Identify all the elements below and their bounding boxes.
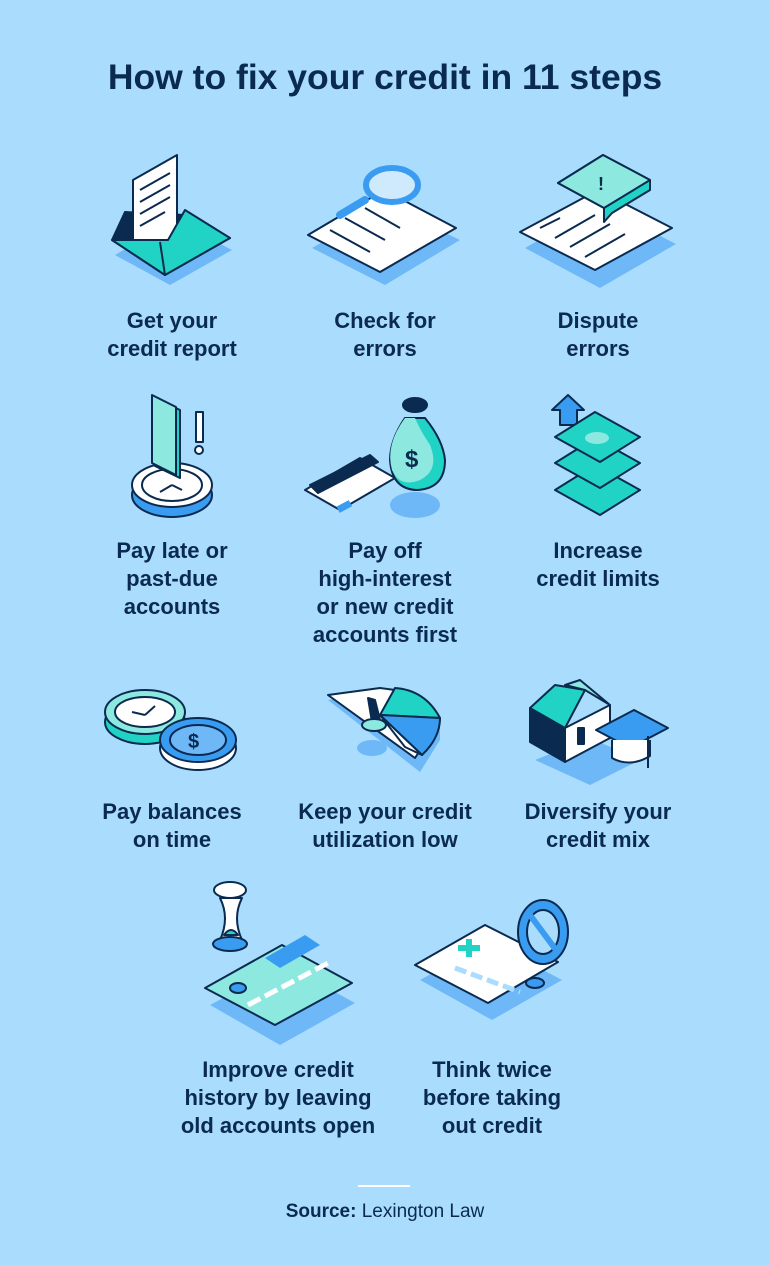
icon: card and money bag: $ (405, 446, 419, 473)
label: think twice: before taking (423, 1085, 561, 1110)
icon: dispute speech bubble: ! (598, 174, 604, 194)
label: improve credit history: Improve credit (202, 1057, 354, 1082)
icon: house and graduation cap (530, 680, 668, 785)
label: improve credit history (181, 1057, 375, 1138)
label: keep utilization low: utilization low (312, 827, 458, 852)
label: get your credit report (107, 308, 237, 361)
label: pay off high-interest: accounts first (313, 622, 457, 647)
label: think twice: out credit (442, 1113, 542, 1138)
label: diversify credit mix (525, 799, 671, 852)
label: pay off high-interest: high-interest (318, 566, 452, 591)
label: pay late accounts: past-due (126, 566, 218, 591)
source: Source: Lexington Law (286, 1201, 484, 1222)
icon: envelope with report (112, 155, 232, 285)
label: improve credit history: history by leaving (184, 1085, 372, 1110)
label: pay off high-interest (313, 538, 457, 647)
label: pay off high-interest: or new credit (317, 594, 453, 619)
label: pay late accounts (116, 538, 228, 619)
icon: magnifier over document (308, 168, 460, 285)
divider (358, 1185, 410, 1187)
label: pay late accounts: accounts (124, 594, 220, 619)
label: dispute errors (558, 308, 638, 361)
label: check for errors (334, 308, 436, 361)
label: increase credit limits: credit limits (536, 566, 660, 591)
label: diversify credit mix: Diversify your (525, 799, 671, 824)
label: get your credit report: Get your (127, 308, 217, 333)
icon: card with no symbol (415, 900, 568, 1020)
icon: card and money bag (305, 398, 445, 518)
label: dispute errors: Dispute (558, 308, 638, 333)
label: keep utilization low (298, 799, 472, 852)
label: get your credit report: credit report (107, 336, 237, 361)
label: increase credit limits (536, 538, 660, 591)
icon: clock and coin (105, 690, 236, 770)
label: think twice (423, 1057, 561, 1138)
title: How to fix your credit in 11 steps (108, 57, 662, 97)
label: pay balances on time: Pay balances (102, 799, 242, 824)
icon: stacked bills with arrow (552, 395, 640, 515)
icon: dispute speech bubble (520, 155, 676, 288)
label: pay balances on time (102, 799, 242, 852)
label: increase credit limits: Increase (553, 538, 643, 563)
icon: utilization gauge (328, 688, 440, 772)
label: check for errors: Check for (334, 308, 436, 333)
label: keep utilization low: Keep your credit (298, 799, 472, 824)
label: dispute errors: errors (566, 336, 630, 361)
label: diversify credit mix: credit mix (546, 827, 650, 852)
icon: clock and coin: $ (188, 731, 199, 753)
label: pay off high-interest: Pay off (348, 538, 422, 563)
label: pay balances on time: on time (133, 827, 211, 852)
icon: hourglass and credit card (205, 882, 355, 1045)
label: think twice: Think twice (432, 1057, 552, 1082)
label: improve credit history: old accounts open (181, 1113, 375, 1138)
icon: money and clock (132, 395, 212, 517)
label: pay late accounts: Pay late or (116, 538, 228, 563)
label: check for errors: errors (353, 336, 417, 361)
